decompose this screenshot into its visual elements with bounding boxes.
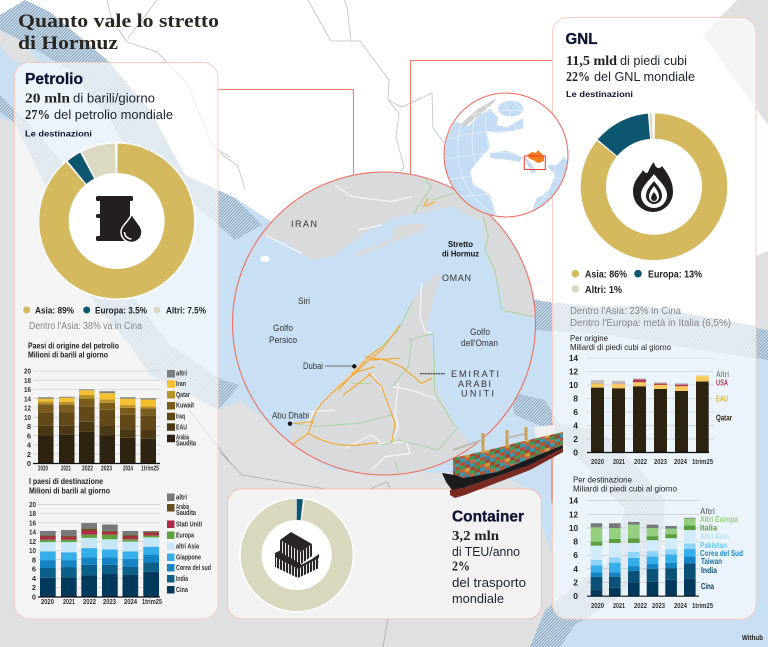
chart title: GNL per origine bbox=[570, 333, 671, 352]
label: Golfo dell'Oman: Golfo bbox=[470, 327, 490, 337]
bar chart: GNL per destinazione: 8 bbox=[573, 536, 578, 546]
bar chart: origine petrolio: 2024 bbox=[123, 464, 133, 472]
icon: oil barrel bbox=[96, 196, 142, 242]
bar chart: GNL per origine: 8 bbox=[573, 394, 578, 404]
bar chart: GNL per destinazione: 2020 bbox=[591, 601, 604, 610]
donut: petrolio bbox=[38, 142, 196, 300]
note: dentro Asia ed Europa bbox=[570, 305, 731, 329]
legend: destinazione petrolio: Giappone bbox=[176, 552, 201, 562]
illustration: container ship bbox=[442, 425, 563, 498]
stat: quota GNL: del GNL mondiale bbox=[594, 69, 695, 84]
panel: GNL bbox=[552, 18, 756, 619]
bar chart: origine petrolio: 14 bbox=[24, 394, 32, 404]
bar chart: origine petrolio: 20 bbox=[24, 367, 31, 376]
marker: Dubai: Dubai bbox=[303, 361, 323, 371]
bar chart: destinazione petrolio: 2024 bbox=[124, 597, 138, 606]
bar chart: origine petrolio: 2021 bbox=[61, 464, 71, 472]
bar chart: origine petrolio: 16 bbox=[24, 385, 31, 394]
bar chart: destinazione petrolio: 4 bbox=[32, 574, 37, 583]
map: stretto di Hormuz bbox=[225, 160, 545, 480]
stat: barili: 20 mln bbox=[25, 90, 71, 106]
legend: petrolio bbox=[23, 306, 206, 316]
stat: trasporto mondiale: mondiale bbox=[452, 591, 504, 606]
donut: container bbox=[239, 498, 354, 612]
bar chart: GNL per destinazione: 2021 bbox=[613, 601, 625, 610]
legend: destinazione petrolio: Saudita bbox=[176, 508, 197, 517]
bar chart: origine petrolio: 2022 bbox=[82, 464, 93, 472]
label: Golfo dell'Oman bbox=[461, 327, 498, 348]
legend: origine petrolio: Iran bbox=[176, 379, 186, 388]
stat: barili bbox=[25, 90, 155, 106]
bar chart: GNL per destinazione: 14 bbox=[569, 496, 578, 506]
panel: container bbox=[228, 489, 542, 619]
bar chart: origine petrolio: 1trim25 bbox=[141, 464, 159, 472]
bar chart: GNL per origine: 10 bbox=[569, 380, 578, 390]
bar chart: destinazione petrolio: 2021 bbox=[63, 597, 75, 606]
bar chart: GNL per origine: 2024 bbox=[674, 457, 688, 466]
bar chart: destinazione petrolio: 2020 bbox=[41, 597, 54, 606]
chart title: destinazione petrolio: Milioni di barili al giorno bbox=[29, 486, 110, 496]
label: Emirati Arabi Uniti bbox=[420, 369, 502, 398]
roads: white bbox=[265, 185, 435, 470]
land: Iran bbox=[262, 172, 535, 318]
bar chart: destinazione petrolio: 6 bbox=[32, 565, 36, 574]
bar chart: GNL per origine: 2 bbox=[573, 434, 578, 444]
stat: quota mondiale: 27% bbox=[25, 107, 50, 122]
bar chart: origine petrolio: 8 bbox=[27, 422, 31, 431]
stat: piedi cubi: 11,5 mld bbox=[566, 53, 618, 68]
note: asia petrolio: Dentro l'Asia: 38% va in Cina bbox=[29, 321, 142, 332]
label: Golfo Persico: Persico bbox=[269, 335, 297, 345]
bar chart: destinazione petrolio: 20 bbox=[29, 500, 36, 509]
bar chart: GNL per origine: 14 bbox=[569, 353, 578, 363]
bar chart: GNL per origine: 2022 bbox=[634, 457, 647, 466]
bar chart: origine petrolio: 2023 bbox=[101, 464, 112, 472]
label: Golfo Persico bbox=[269, 323, 297, 345]
legend: destinazione petrolio: altri Asia bbox=[176, 542, 200, 550]
panel: petrolio bbox=[14, 62, 218, 619]
marker: Abu Dhabi: Abu Dhabi bbox=[272, 410, 309, 420]
stat: piedi cubi bbox=[566, 53, 687, 68]
label: Emirati Arabi Uniti: UNITI bbox=[461, 388, 497, 398]
bar chart: GNL per origine: 2023 bbox=[654, 457, 667, 466]
legend: origine petrolio bbox=[167, 368, 197, 448]
bar chart: GNL per origine: 2021 bbox=[613, 457, 625, 466]
heading: container: Container bbox=[452, 509, 524, 526]
marker: Abu Dhabi bbox=[272, 410, 309, 426]
bar chart: destinazione petrolio: 18 bbox=[29, 509, 36, 518]
legend: origine petrolio: altri bbox=[176, 368, 187, 378]
legend: petrolio: Asia: 89% bbox=[35, 306, 74, 316]
legend: GNL: Altri: 1% bbox=[585, 285, 622, 296]
bar chart: GNL per origine: 1trim25 bbox=[692, 457, 713, 466]
label: Emirati Arabi Uniti: ARABI bbox=[458, 379, 494, 389]
legend: origine petrolio: EAU bbox=[176, 422, 187, 431]
labels: GNL per origine bbox=[716, 370, 732, 422]
label: Siri: Siri bbox=[298, 296, 310, 306]
legend: petrolio: Altri: 7.5% bbox=[166, 306, 206, 316]
bar chart: GNL per destinazione: 6 bbox=[573, 550, 578, 560]
legend: origine petrolio: Kuwait bbox=[176, 400, 194, 410]
bar chart: origine petrolio: 10 bbox=[24, 413, 31, 422]
legend: origine petrolio: Qatar bbox=[176, 390, 190, 399]
bar chart: GNL per destinazione bbox=[569, 496, 713, 610]
donut: GNL bbox=[593, 126, 715, 247]
labels: GNL per destinazione: Taiwan bbox=[701, 557, 722, 566]
bar chart: origine petrolio: 12 bbox=[24, 404, 31, 413]
label: stretto di Hormuz bbox=[442, 240, 479, 258]
legend: GNL: Europa: 13% bbox=[648, 270, 702, 281]
label: Oman: OMAN bbox=[442, 273, 474, 283]
legend: GNL bbox=[572, 270, 702, 296]
label: Iran: IRAN bbox=[291, 219, 320, 229]
labels: GNL per origine: USA bbox=[716, 378, 728, 388]
chart title: destinazione petrolio: I paesi di destinazione bbox=[29, 476, 103, 486]
label: stretto di Hormuz: Stretto bbox=[448, 240, 473, 249]
label: Golfo Persico: Golfo bbox=[273, 323, 293, 333]
bar chart: origine petrolio bbox=[24, 367, 160, 472]
legend: destinazione petrolio: Cina bbox=[176, 585, 189, 594]
bar chart: destinazione petrolio: 2 bbox=[32, 583, 36, 592]
label: Golfo dell'Oman: dell'Oman bbox=[461, 338, 498, 348]
bar chart: origine petrolio: 18 bbox=[24, 376, 31, 385]
legend: destinazione petrolio bbox=[167, 492, 211, 594]
bar chart: GNL per destinazione: 2 bbox=[573, 577, 578, 587]
labels: GNL per origine: Altri bbox=[716, 370, 729, 379]
connector lines bbox=[218, 60, 552, 174]
title bbox=[18, 12, 219, 54]
bar chart: origine petrolio: 2020 bbox=[38, 464, 48, 472]
bar chart: destinazione petrolio: 8 bbox=[32, 555, 36, 564]
bar chart: GNL per origine: 0 bbox=[573, 447, 578, 457]
labels: GNL per destinazione: Pakistan bbox=[700, 541, 727, 550]
heading: GNL: GNL bbox=[566, 31, 598, 48]
legend: destinazione petrolio: Stati Uniti bbox=[176, 520, 202, 528]
labels: GNL per destinazione: Cina bbox=[701, 582, 714, 591]
bar chart: destinazione petrolio: 2023 bbox=[103, 597, 116, 606]
labels: GNL per origine: EAU bbox=[716, 394, 728, 404]
bar chart: destinazione petrolio: 12 bbox=[29, 537, 36, 546]
bar chart: destinazione petrolio: 1trim25 bbox=[142, 597, 162, 606]
legend: destinazione petrolio: altri bbox=[176, 492, 187, 502]
bar chart: destinazione petrolio: 0 bbox=[32, 592, 36, 601]
legend: origine petrolio: Iraq bbox=[176, 412, 185, 420]
subheading: destinazioni GNL: Le destinazioni bbox=[566, 89, 633, 99]
bar chart: GNL per origine: 2020 bbox=[591, 457, 604, 466]
stat: TEU: di TEU/anno bbox=[452, 544, 520, 559]
bar chart: origine petrolio: 4 bbox=[27, 441, 32, 450]
stat: TEU: 3,2 mln bbox=[452, 528, 500, 543]
globe bbox=[443, 92, 569, 218]
legend: petrolio: Europa: 3.5% bbox=[95, 306, 147, 316]
bar chart: GNL per origine: 4 bbox=[573, 420, 578, 430]
labels: GNL per destinazione: Altri Europa bbox=[700, 515, 738, 524]
stat: trasporto mondiale bbox=[452, 559, 526, 606]
bar chart: destinazione petrolio: 14 bbox=[29, 528, 37, 537]
credit: Withub bbox=[742, 633, 763, 642]
bar chart: GNL per destinazione: 12 bbox=[569, 509, 578, 519]
labels: GNL per origine: Qatar bbox=[716, 414, 732, 422]
bar chart: origine petrolio: 2 bbox=[27, 450, 31, 459]
stat: barili: di barili/giorno bbox=[73, 90, 155, 106]
accent line bbox=[551, 423, 553, 503]
heading: petrolio: Petrolio bbox=[25, 71, 83, 88]
legend: destinazione petrolio: Corea del sud bbox=[176, 563, 211, 572]
legend: destinazione petrolio: Europa bbox=[176, 530, 195, 540]
bar chart: GNL per origine: 6 bbox=[573, 407, 578, 417]
legend: origine petrolio: Saudita bbox=[176, 438, 197, 448]
icon: flame bbox=[633, 162, 673, 212]
labels: GNL per destinazione: India bbox=[701, 566, 717, 575]
labels: GNL per destinazione: Altri bbox=[700, 507, 715, 516]
bar chart: GNL per destinazione: 10 bbox=[569, 523, 578, 533]
legend: GNL: Asia: 86% bbox=[585, 270, 627, 281]
bar chart: destinazione petrolio bbox=[29, 500, 162, 606]
chart title: GNL per origine: Per origine bbox=[570, 333, 608, 343]
chart title: origine petrolio bbox=[28, 340, 119, 360]
bar chart: GNL per destinazione: 4 bbox=[573, 564, 578, 574]
legend: origine petrolio: Arabia bbox=[176, 432, 189, 442]
stat: quota GNL: 22% bbox=[566, 69, 590, 84]
bar chart: destinazione petrolio: 2022 bbox=[83, 597, 96, 606]
highlight: Iran bbox=[527, 150, 544, 163]
icon: containers bbox=[275, 532, 319, 578]
stat: piedi cubi: di piedi cubi bbox=[620, 53, 687, 68]
note: dentro Asia ed Europa: Dentro l'Asia: 23% in Cina bbox=[570, 305, 681, 317]
bar chart: origine petrolio: 0 bbox=[27, 459, 31, 468]
labels: GNL per destinazione: Italia bbox=[700, 524, 718, 532]
stat: trasporto mondiale: del trasporto bbox=[452, 575, 526, 590]
bar chart: destinazione petrolio: 16 bbox=[29, 518, 36, 528]
label: stretto di Hormuz: di Hormuz bbox=[442, 250, 479, 258]
chart title: origine petrolio: Milioni di barili al giorno bbox=[28, 350, 108, 360]
labels: GNL per destinazione: Altri Asia bbox=[700, 532, 729, 541]
bar chart: GNL per origine bbox=[569, 353, 714, 466]
chart title: GNL per destinazione: Miliardi di piedi cubi al giorno bbox=[573, 484, 677, 494]
stat: TEU bbox=[452, 528, 520, 559]
bar chart: GNL per destinazione: 2022 bbox=[634, 601, 647, 610]
chart title: destinazione petrolio bbox=[29, 476, 110, 496]
stat: quota mondiale: del petrolio mondiale bbox=[54, 107, 173, 122]
bar chart: GNL per destinazione: 2023 bbox=[652, 601, 665, 610]
bar chart: GNL per destinazione: 0 bbox=[573, 591, 578, 601]
title: di Hormuz bbox=[18, 34, 118, 54]
bar chart: GNL per destinazione: 2024 bbox=[674, 601, 688, 610]
land: Emirati e Oman bbox=[288, 274, 472, 474]
labels: GNL per destinazione: Corea del Sud bbox=[700, 549, 743, 558]
bar chart: destinazione petrolio: 10 bbox=[29, 546, 36, 555]
note: dentro Asia ed Europa: Dentro l'Europa: metà in Italia (6,5%) bbox=[570, 317, 731, 329]
label: Emirati Arabi Uniti: EMIRATI bbox=[451, 369, 502, 379]
subheading: destinazioni: Le destinazioni bbox=[25, 128, 92, 138]
locator box bbox=[524, 156, 545, 170]
chart title: GNL per destinazione bbox=[573, 475, 677, 494]
title: Quanto vale lo stretto bbox=[18, 12, 219, 32]
roads: orange bbox=[293, 198, 435, 445]
chart title: GNL per origine: Miliardi di piedi cubi al giorno bbox=[570, 342, 671, 352]
island: Qeshm bbox=[357, 223, 428, 257]
labels: GNL per destinazione bbox=[700, 507, 743, 591]
marker: Dubai bbox=[303, 361, 356, 371]
legend: destinazione petrolio: India bbox=[176, 574, 189, 583]
bar chart: origine petrolio: 6 bbox=[27, 431, 31, 440]
legend: destinazione petrolio: Arabia bbox=[176, 502, 189, 511]
chart title: origine petrolio: Paesi di origine del petrolio bbox=[28, 340, 119, 350]
roads: green bbox=[293, 178, 533, 473]
bar chart: GNL per destinazione: 1trim25 bbox=[692, 601, 713, 610]
stat: trasporto mondiale: 2% bbox=[452, 559, 470, 574]
bar chart: GNL per origine: 12 bbox=[569, 366, 578, 376]
chart title: GNL per destinazione: Per destinazione bbox=[573, 475, 632, 485]
